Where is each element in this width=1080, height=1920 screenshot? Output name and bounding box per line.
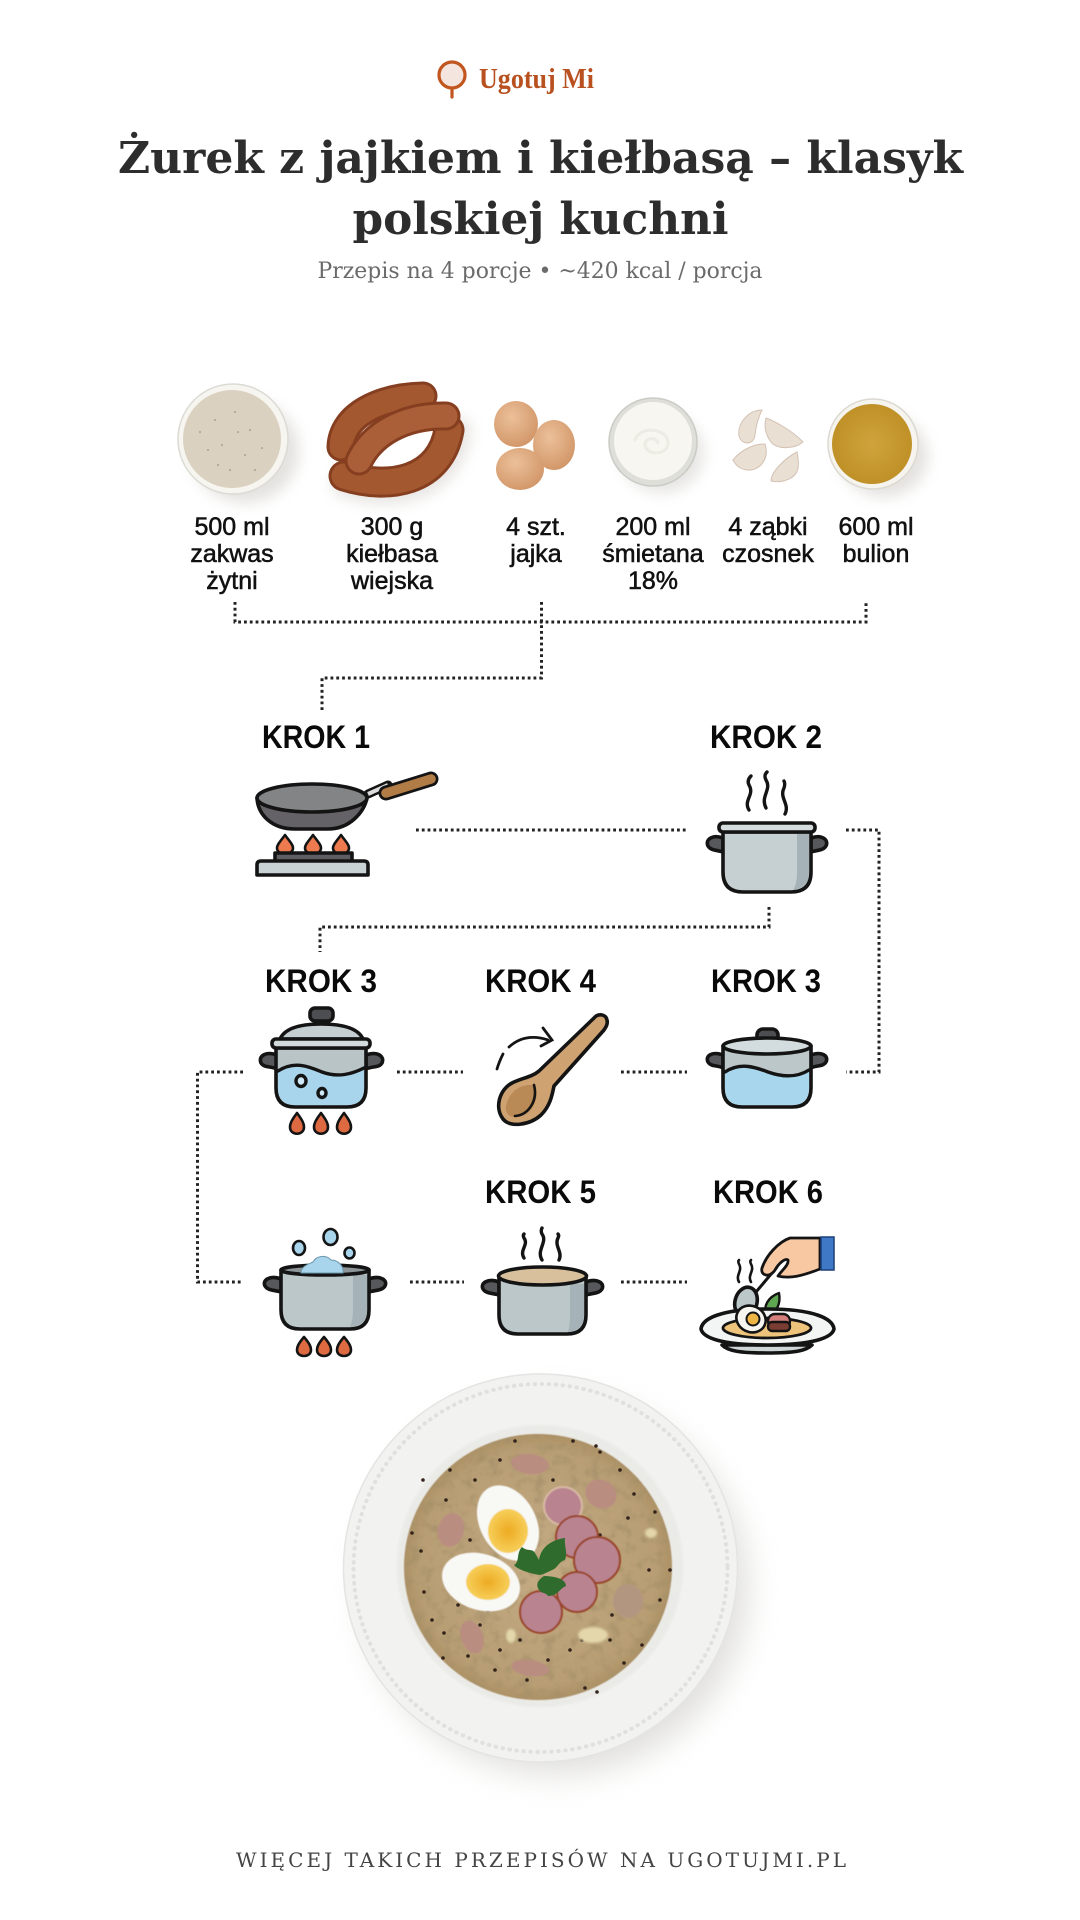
label: 4 ząbki czosnek: czosnek bbox=[722, 540, 814, 568]
title: polskiej kuchni bbox=[352, 194, 728, 245]
ingredient: rye starter bowl bbox=[178, 384, 299, 503]
ingredient labels bbox=[190, 513, 914, 595]
subtitle: Przepis na 4 porcje • ~420 kcal / porcja bbox=[318, 259, 762, 284]
step 2: heading: KROK 2 bbox=[710, 719, 822, 755]
step: boiling pot icon bbox=[264, 1229, 386, 1356]
label: 200 ml śmietana 18%: 200 ml bbox=[615, 513, 691, 541]
logo: Ugotuj Mi: Ugotuj Mi bbox=[479, 64, 594, 95]
parsley garnish bbox=[514, 1538, 566, 1596]
soup plate photo bbox=[344, 1374, 748, 1775]
label: 300 g kiełbasa wiejska bbox=[346, 513, 438, 595]
label: 300 g kiełbasa wiejska: kiełbasa bbox=[346, 540, 438, 568]
step 5: pot of soup icon bbox=[482, 1228, 603, 1334]
step 1: heading: KROK 1 bbox=[262, 719, 370, 755]
label: 600 ml bulion: bulion bbox=[843, 540, 909, 568]
label: 200 ml śmietana 18% bbox=[602, 513, 704, 595]
label: 300 g kiełbasa wiejska: wiejska bbox=[350, 567, 433, 595]
dotted connectors bbox=[198, 602, 879, 1282]
soup bbox=[404, 1434, 672, 1700]
step 3: pot with water icon bbox=[707, 1029, 827, 1107]
soup grain texture bbox=[404, 1434, 672, 1700]
step 3: heading (right): KROK 3 bbox=[711, 963, 821, 999]
label: 600 ml bulion bbox=[838, 513, 914, 568]
potato pieces bbox=[506, 1528, 657, 1643]
step 6: heading: KROK 6 bbox=[713, 1174, 823, 1210]
plate bbox=[344, 1374, 738, 1762]
label: 500 ml zakwas żytni: zakwas bbox=[190, 540, 274, 568]
label: 200 ml śmietana 18%: 18% bbox=[628, 567, 678, 595]
label: 4 szt. jajka: jajka bbox=[509, 540, 562, 568]
title: Żurek z jajkiem i kiełbasą – klasyk bbox=[118, 130, 965, 184]
label: 500 ml zakwas żytni: żytni bbox=[206, 567, 258, 595]
sausage slices bbox=[520, 1487, 620, 1633]
label: 200 ml śmietana 18%: śmietana bbox=[602, 540, 704, 568]
label: 300 g kiełbasa wiejska: 300 g bbox=[361, 513, 423, 541]
step 6: serving soup icon bbox=[701, 1237, 834, 1353]
footer: WIĘCEJ TAKICH PRZEPISÓW NA UGOTUJMI.PL bbox=[236, 1847, 846, 1872]
logo: Ugotuj Mi bbox=[439, 62, 594, 97]
ingredient: smoked sausage bbox=[341, 396, 458, 491]
ingredient: garlic cloves bbox=[733, 410, 803, 482]
step 2: steaming pot icon bbox=[707, 772, 827, 892]
label: 600 ml bulion: 600 ml bbox=[838, 513, 914, 541]
label: 4 ząbki czosnek bbox=[722, 513, 814, 568]
label: 4 szt. jajka: 4 szt. bbox=[506, 513, 566, 541]
ingredient: eggs bbox=[494, 401, 575, 490]
soup specks bbox=[412, 1441, 670, 1692]
step 4: heading: KROK 4 bbox=[485, 963, 596, 999]
panel: ingredients bbox=[178, 384, 928, 503]
label: 500 ml zakwas żytni bbox=[190, 513, 274, 595]
step 3: heading (left): KROK 3 bbox=[265, 963, 377, 999]
step 3: covered pot with water icon bbox=[260, 1008, 383, 1134]
label: 500 ml zakwas żytni: 500 ml bbox=[194, 513, 270, 541]
step 1: pan on burner icon bbox=[257, 779, 431, 875]
ingredient: sour cream bowl bbox=[609, 398, 704, 493]
pale sausage slices bbox=[434, 1452, 643, 1679]
ingredient: broth bowl bbox=[828, 399, 928, 497]
label: 4 ząbki czosnek: 4 ząbki bbox=[728, 513, 808, 541]
plate shadow bbox=[364, 1399, 748, 1775]
boiled egg halves bbox=[434, 1475, 552, 1621]
title bbox=[118, 130, 965, 245]
step 4: wooden spoon stirring icon bbox=[497, 1015, 607, 1124]
step 5: heading: KROK 5 bbox=[485, 1174, 596, 1210]
label: 4 szt. jajka bbox=[506, 513, 566, 568]
